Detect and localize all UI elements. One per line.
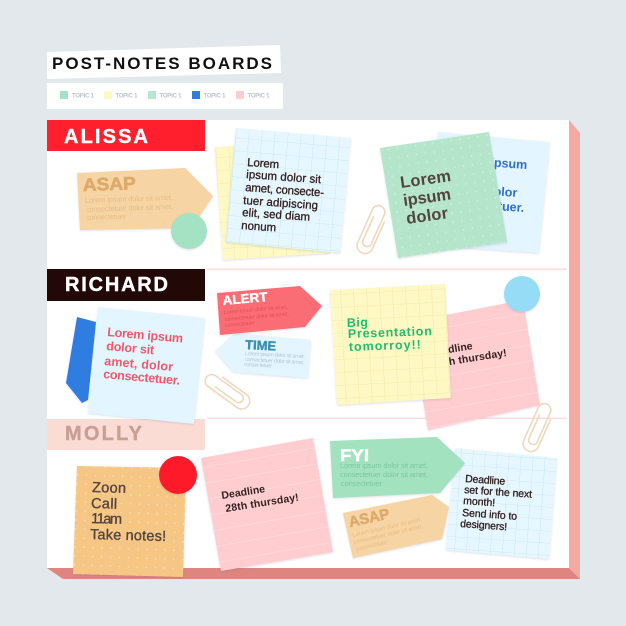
green dotted note: ipsum	[402, 185, 452, 210]
name bar: Alissa	[47, 120, 205, 151]
legend: TOPIC 1	[116, 94, 138, 100]
pink lined note (Richard)	[410, 300, 540, 430]
blue grid note with text (Alissa): tuer adipiscing	[243, 195, 318, 212]
yellow grid note with green text: Big	[347, 315, 368, 330]
ASAP tag note (Molly): ASAP	[347, 506, 391, 531]
name bar: Molly: MOLLY	[65, 423, 143, 445]
blue grid note with text (Alissa): nonum	[241, 220, 277, 234]
FYI tag note: consectetuer	[341, 479, 382, 488]
yellow grid note (Alissa)	[215, 143, 330, 260]
pin: blue circle	[504, 276, 540, 312]
blue page behind green note: dolor	[486, 184, 518, 200]
name bar: Richard	[47, 269, 205, 301]
ASAP tag note (Alissa)	[77, 168, 213, 230]
ALERT tag note: Lorem ipsum dolor sit amet,	[224, 304, 288, 316]
FYI tag note: consectetuer dolor sit amet,	[340, 470, 428, 479]
legend: TOPIC 1	[160, 94, 182, 100]
blue grid note with text (Molly): designers!	[460, 518, 508, 533]
ASAP tag note (Molly): consectetuer	[355, 540, 388, 553]
TIME tag note	[215, 333, 311, 378]
paperclip (Alissa)	[355, 203, 390, 256]
TIME tag note: TIME	[245, 337, 277, 354]
blue grid note with text (Molly): set for the next	[464, 484, 533, 501]
blue page behind green note: Lorem ipsum	[448, 153, 528, 172]
yellow grid note with green text	[330, 284, 451, 405]
ASAP tag note (Alissa): consectetuer	[86, 212, 127, 222]
ASAP tag note (Molly)	[343, 495, 449, 558]
blue tab	[66, 317, 96, 403]
blue grid note with text (Alissa): ipsum dolor sit	[246, 169, 322, 186]
blue page behind green note	[428, 132, 550, 253]
ASAP tag note (Molly): Lorem ipsum dolor sit amet,	[352, 517, 423, 539]
paperclip (over pink note)	[521, 401, 556, 454]
paperclip (Richard)	[203, 370, 253, 412]
ASAP tag note (Molly): consectetuer dolor sit amet,	[353, 524, 424, 546]
board frame	[47, 120, 580, 579]
legend	[47, 83, 283, 109]
title banner	[47, 45, 281, 79]
ASAP tag note (Alissa): Lorem ipsum dolor sit amet,	[85, 193, 173, 205]
blue grid note with text (Alissa): amet, consecte-	[245, 182, 325, 200]
pink lined note (Molly): Deadline	[221, 483, 266, 502]
title banner: POST-NOTES BOARDS	[52, 54, 272, 73]
pink lined note (Richard): Deadline	[428, 340, 474, 359]
TIME tag note: consectetuer dolor sit amet,	[245, 357, 305, 366]
blue grid note with text (Molly)	[446, 448, 557, 559]
ASAP tag note (Alissa): ASAP	[82, 173, 136, 195]
FYI tag note: FYI	[340, 446, 369, 465]
ASAP tag note (Alissa): consectetuer dolor sit amet,	[86, 202, 173, 214]
pink lined note (Molly)	[201, 438, 333, 571]
yellow grid note with green text: tomorroy!!	[349, 337, 421, 354]
light blue note with red text (Richard)	[88, 307, 205, 424]
light blue note with red text (Richard): consectetuer.	[103, 367, 181, 388]
pin: green circle	[171, 213, 207, 249]
light blue note with red text (Richard): amet, dolor	[104, 354, 174, 374]
FYI tag note: Lorem ipsum dolor sit amet,	[340, 461, 428, 470]
light blue note with red text (Richard): dolor sit	[106, 339, 156, 357]
ALERT tag note: consectetuer dolor sit amet,	[225, 311, 289, 323]
blue grid note with text (Alissa)	[226, 128, 351, 253]
pin: red circle	[159, 456, 197, 494]
orange dotted note (Molly)	[73, 466, 186, 577]
orange dotted note (Molly): Call	[91, 496, 117, 513]
blue page behind green note: consectetuer.	[443, 195, 525, 215]
green dotted note: Lorem	[399, 167, 452, 192]
blue grid note with text (Molly): Deadline	[465, 473, 506, 488]
legend: TOPIC 1	[204, 94, 226, 100]
pink lined note (Molly): 28th thursday!	[225, 492, 300, 515]
blue grid note with text (Alissa): elit, sed diam	[242, 207, 310, 224]
TIME tag note: consectetuer	[244, 362, 272, 369]
light blue note with red text (Richard): Lorem ipsum	[107, 325, 184, 346]
orange dotted note (Molly): Zoon	[92, 480, 126, 497]
blue grid note with text (Molly): month!	[463, 495, 496, 509]
pink lined note (Richard): 28th thursday!	[433, 347, 508, 370]
legend: TOPIC 1	[248, 94, 270, 100]
orange dotted note (Molly): 11am	[91, 511, 122, 528]
ALERT tag note: ALERT	[222, 289, 268, 308]
ALERT tag note	[217, 286, 322, 335]
TIME tag note: Lorem ipsum dolor sit amet,	[245, 351, 306, 360]
name bar: Molly	[47, 419, 205, 450]
ALERT tag note: consectetuer	[225, 320, 255, 329]
blue grid note with text (Molly): Send info to	[462, 507, 518, 523]
name bar: Richard: RICHARD	[65, 274, 168, 296]
green dotted note	[380, 132, 507, 258]
yellow grid note with green text: Presentation	[348, 324, 432, 341]
FYI tag note	[330, 437, 465, 498]
name bar: Alissa: ALISSA	[64, 126, 148, 148]
green dotted note: dolor	[405, 204, 450, 228]
orange dotted note (Molly): Take notes!	[90, 527, 166, 545]
legend: TOPIC 1	[72, 94, 95, 100]
blue grid note with text (Alissa): Lorem	[247, 157, 280, 171]
